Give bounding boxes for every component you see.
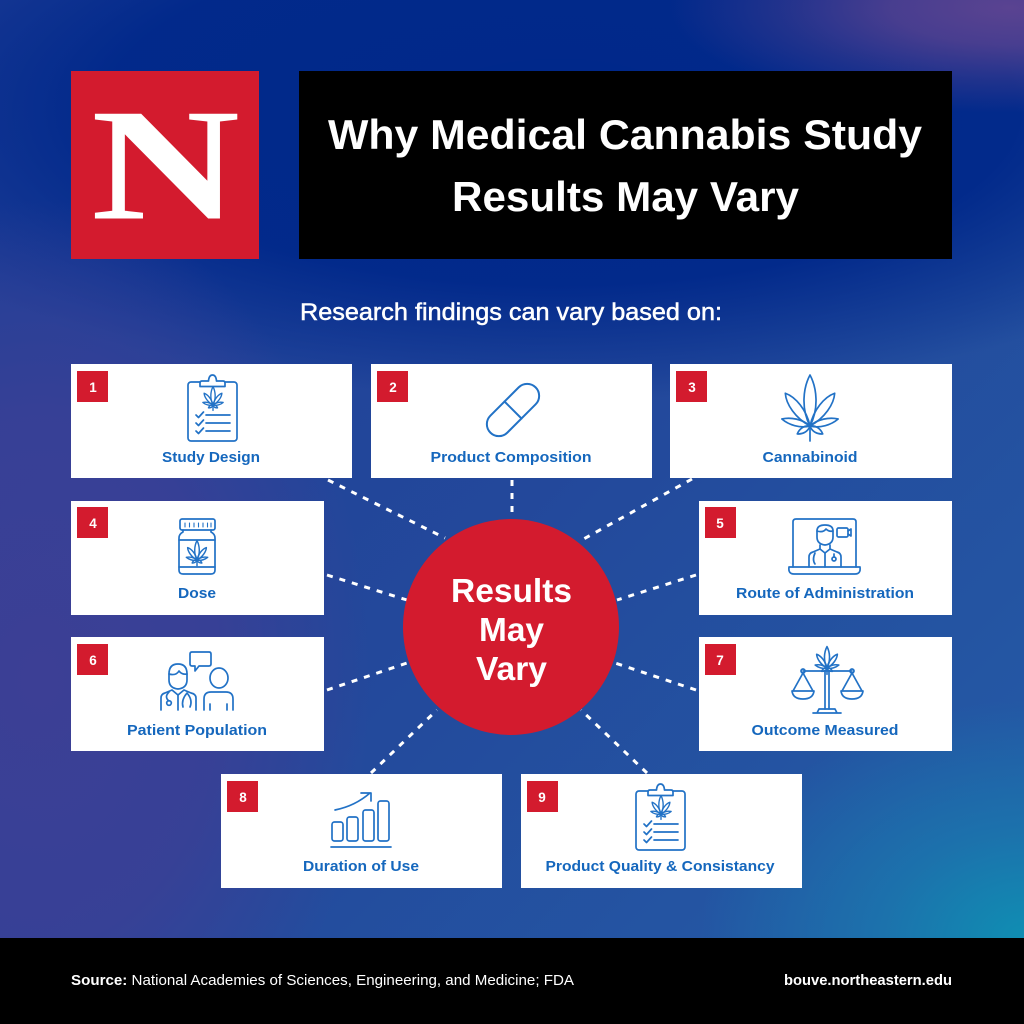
panel 7: Outcome Measured: Outcome Measured [752, 722, 898, 739]
panel 4: Dose: 4 [89, 516, 97, 531]
panel 5: Route of Administration: Route of Administration [736, 585, 914, 602]
central circle: Results May Vary: Vary [476, 650, 548, 687]
dashed connectors [327, 479, 696, 773]
panel 4: Dose: Dose [178, 585, 216, 602]
panel 5: Route of Administration [699, 501, 952, 615]
footer bar [0, 938, 1024, 1024]
icon: rising bar chart [331, 793, 391, 847]
panel 9: Product Quality & Consistancy [521, 774, 802, 888]
panel 2: Product Composition: Product Composition [430, 449, 592, 466]
panel 6: Patient Population: Patient Population [127, 722, 267, 739]
panel 1: Study Design: Study Design [162, 449, 260, 466]
panel 3: Cannabinoid: 3 [688, 380, 696, 395]
panel 2: Product Composition: 2 [389, 380, 397, 395]
panel 2: Product Composition [371, 364, 652, 478]
title banner [299, 71, 952, 259]
panel 8: Duration of Use: Duration of Use [303, 858, 419, 875]
panel 3: Cannabinoid: Cannabinoid [762, 449, 858, 466]
icon: cannabis leaf [781, 375, 839, 441]
website url: bouve.northeastern.edu [784, 973, 952, 989]
icon: scales with leaf [792, 647, 863, 713]
logo: Northeastern N [71, 71, 259, 259]
panel 8: Duration of Use [221, 774, 502, 888]
icon: clipboard with leaf [636, 784, 685, 850]
central circle: Results May Vary: May [479, 611, 545, 648]
panel 8: Duration of Use: 8 [239, 790, 247, 805]
panel 3: Cannabinoid [670, 364, 952, 478]
icon: medicine bottle [179, 519, 215, 574]
panel 9: Product Quality & Consistancy: 9 [538, 790, 546, 805]
panel 1: Study Design: 1 [89, 380, 97, 395]
icon: doctor and patient talking [161, 652, 233, 710]
panel 1: Study Design [71, 364, 352, 478]
icon: clipboard with leaf [188, 375, 237, 441]
subheading: Research findings can vary based on: [300, 299, 722, 326]
icon: telehealth doctor on laptop [789, 519, 860, 574]
title banner: Results May Vary [452, 173, 800, 220]
panel 9: Product Quality & Consistancy: Product Quality & Consistancy [546, 858, 775, 875]
panel 7: Outcome Measured: 7 [716, 653, 724, 668]
panel 6: Patient Population: 6 [89, 653, 97, 668]
central circle: Results May Vary: Results [451, 572, 572, 609]
panel 7: Outcome Measured [699, 637, 952, 751]
title banner: Why Medical Cannabis Study [328, 111, 923, 158]
panel 4: Dose [71, 501, 324, 615]
source credit: Source: National Academies of Sciences, Engineering, and Medicine; FDA [71, 973, 574, 989]
icon: capsule [482, 379, 544, 441]
panel 5: Route of Administration: 5 [716, 516, 724, 531]
panel 6: Patient Population [71, 637, 324, 751]
logo: Northeastern N: N [91, 76, 240, 254]
central circle: Results May Vary [403, 519, 619, 735]
